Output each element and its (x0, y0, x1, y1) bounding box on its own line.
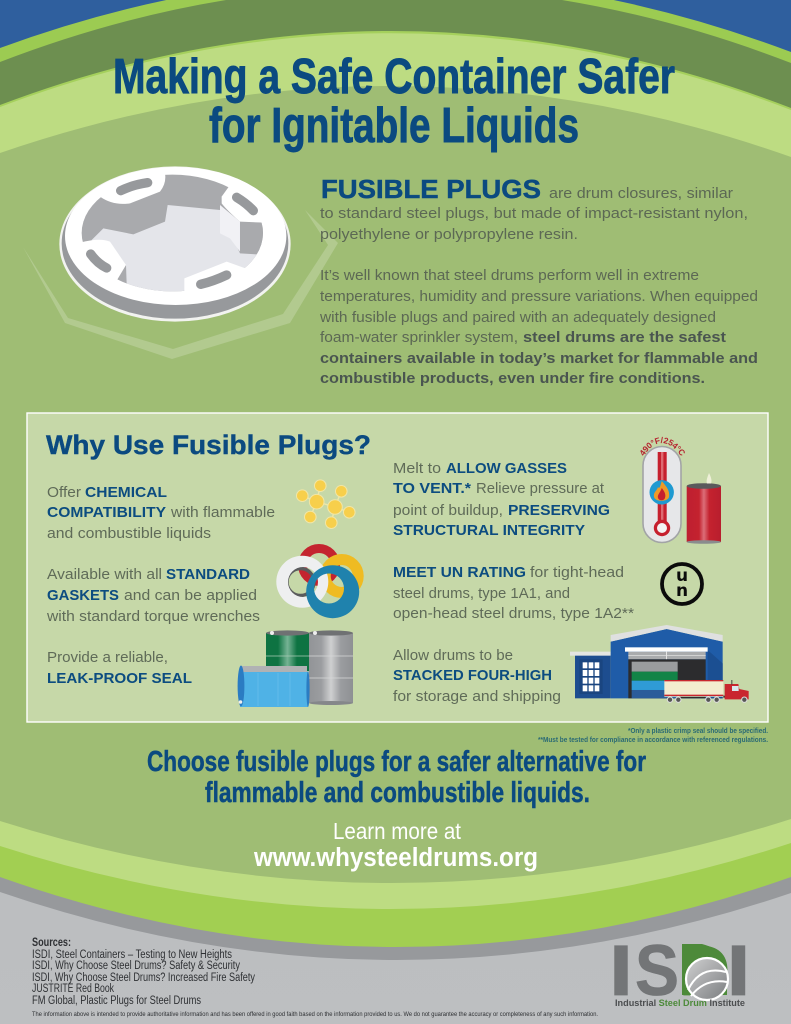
icon: steel drums (238, 630, 353, 707)
text: chemical compatibility: CHEMICAL (85, 484, 167, 501)
text: standard gaskets: STANDARD (166, 566, 250, 583)
text: leak-proof seal: Provide a reliable, (47, 649, 168, 666)
learn more link: www.whysteeldrums.org (253, 844, 538, 872)
text: chemical compatibility: Offer (47, 484, 81, 501)
call to action (147, 746, 646, 809)
text: un rating (393, 564, 634, 622)
text block: steel drums paragraph: temperatures, humidity and pressure variations. When equipped (320, 288, 758, 305)
text: allow gasses to vent: STRUCTURAL INTEGRITY (393, 522, 585, 539)
text block: fusible plugs intro: to standard steel plugs, but made of impact-resistant nylon, (320, 205, 748, 222)
sources: JUSTRITE Red Book (32, 983, 114, 995)
text: chemical compatibility: with flammable (170, 504, 275, 521)
text: chemical compatibility: and combustible liquids (47, 525, 211, 542)
sources (32, 937, 255, 1007)
icon: UN mark: u (676, 566, 688, 586)
text: chemical compatibility: COMPATIBILITY (47, 504, 166, 521)
text: un rating: MEET UN RATING (393, 564, 526, 581)
sources: ISDI, Why Choose Steel Drums? Safety & Security (32, 960, 240, 972)
sources: Sources: (32, 937, 71, 949)
icon: yellow molecule (296, 480, 355, 528)
logo: ISDI: D (679, 932, 730, 1011)
footnotes (538, 726, 768, 744)
text: standard gaskets: and can be applied (124, 587, 257, 604)
heading: why use fusible plugs: Why Use Fusible Plugs? (46, 430, 371, 460)
text block: steel drums paragraph: containers available in today’s market for flammable and (320, 350, 758, 367)
text block: steel drums paragraph: combustible products, even under fire conditions. (320, 370, 705, 387)
decorative plate outline behind plug (23, 210, 338, 359)
text: stacked four-high: Allow drums to be (393, 647, 513, 664)
icon: thermometer and red drum (640, 436, 721, 544)
sources: FM Global, Plastic Plugs for Steel Drums (32, 995, 201, 1007)
text block: steel drums paragraph (319, 267, 758, 387)
title: for Ignitable Liquids (209, 99, 579, 153)
text: un rating: open-head steel drums, type 1A2** (393, 605, 634, 622)
text: standard gaskets: GASKETS (47, 587, 119, 604)
text: stacked four-high (393, 647, 561, 705)
text: leak-proof seal: LEAK-PROOF SEAL (47, 670, 192, 687)
icon: warehouse and truck (570, 625, 749, 702)
panel: why use fusible plugs (26, 412, 769, 723)
text block: fusible plugs intro: FUSIBLE PLUGS (321, 174, 541, 204)
text: stacked four-high: for storage and shipping (393, 688, 561, 705)
text: leak-proof seal (47, 649, 192, 687)
learn more link (253, 818, 538, 872)
icon: fusible plug (59, 166, 291, 322)
footnotes: *Only a plastic crimp seal should be specified. (628, 726, 768, 735)
text: allow gasses to vent: Melt to (393, 460, 441, 477)
icon: gasket rings (276, 548, 359, 618)
text: standard gaskets (46, 566, 260, 625)
text: allow gasses to vent: point of buildup, (393, 502, 503, 519)
logo: ISDI (609, 932, 750, 1011)
call to action: flammable and combustible liquids. (205, 777, 590, 809)
text: allow gasses to vent: PRESERVING (508, 502, 610, 519)
text block: fusible plugs intro: polyethylene or polypropylene resin. (320, 226, 578, 243)
text block: steel drums paragraph: steel drums are the safest (523, 329, 726, 346)
text: chemical compatibility (47, 484, 275, 542)
text: stacked four-high: STACKED FOUR-HIGH (393, 667, 552, 684)
text: standard gaskets: with standard torque wrenches (46, 608, 260, 625)
text: standard gaskets: Available with all (47, 566, 162, 583)
text: un rating: for tight-head (530, 564, 624, 581)
logo: ISDI: S (635, 932, 679, 1011)
icon: UN mark (662, 564, 702, 604)
logo: ISDI: Industrial Steel Drum Institute (615, 998, 745, 1009)
sources: ISDI, Steel Containers – Testing to New Heights (32, 949, 232, 961)
call to action: Choose fusible plugs for a safer alternative for (147, 746, 646, 778)
logo: ISDI: I (609, 932, 633, 1011)
text block: steel drums paragraph: foam-water sprinkler system, (320, 329, 518, 346)
sources: ISDI, Why Choose Steel Drums? Increased Fire Safety (32, 972, 255, 984)
text block: steel drums paragraph: It’s well known that steel drums perform well in extreme (320, 267, 699, 284)
text block: fusible plugs intro: are drum closures, similar (549, 185, 733, 202)
learn more link: Learn more at (333, 818, 462, 844)
text: allow gasses to vent: Relieve pressure at (476, 480, 605, 497)
disclaimer: The information above is intended to provide authoritative information and has been offered in good faith based on the information provided to us. We do not guarantee the accuracy or completeness of any such information. (32, 1011, 598, 1018)
logo: ISDI: I (726, 932, 750, 1011)
text: un rating: steel drums, type 1A1, and (393, 585, 570, 602)
icon: UN mark: n (676, 581, 688, 601)
text block: fusible plugs intro (320, 174, 748, 243)
temperature label: 490°F/254°C (640, 436, 685, 456)
text: allow gasses to vent (393, 460, 610, 539)
text: allow gasses to vent: TO VENT.* (393, 480, 471, 497)
text block: steel drums paragraph: with fusible plugs and paired with an adequately designed (319, 309, 716, 326)
title (113, 50, 675, 153)
text: allow gasses to vent: ALLOW GASSES (446, 460, 567, 477)
